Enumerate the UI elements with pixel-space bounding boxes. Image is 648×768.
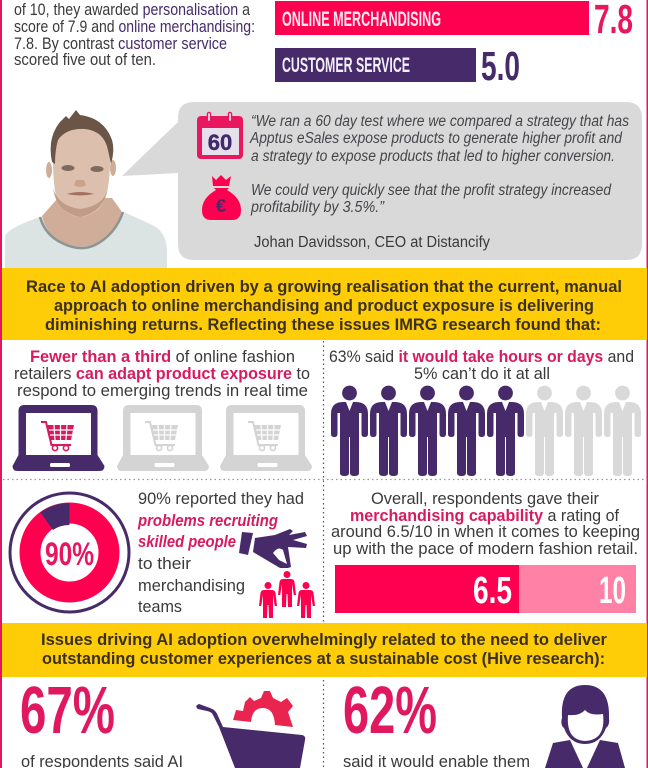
bar chart: rating 6.5 of 10: 6.5 (473, 570, 512, 612)
text block: recruiting problems: problems recruiting (137, 512, 278, 530)
banner: issues driving AI adoption: Issues driving AI adoption overwhelmingly related to the need to deliver (41, 630, 607, 649)
dotted dividers (3, 341, 646, 768)
text block: merchandising capability: around 6.5/10 in when it comes to keeping (331, 523, 640, 541)
chart: 90 percent donut (10, 493, 129, 612)
text block: score summary: 7.8. By contrast customer service (14, 35, 227, 53)
icon: money bag (202, 175, 241, 220)
speech bubble quote: Johan Davidsson, CEO at Distancify (254, 234, 490, 251)
text block: merchandising capability: merchandising capability a rating of (350, 507, 619, 525)
text block: score summary: scored five out of ten. (14, 51, 156, 69)
stat: 62 percent (343, 673, 530, 768)
icon: calendar 60: 60 (208, 130, 232, 155)
banner: race to AI adoption: diminishing returns. Reflecting these issues IMRG research found that: (45, 315, 601, 334)
text block: fewer than a third: respond to emerging trends in real time (17, 382, 308, 400)
chart: 90 percent donut: 90% (45, 536, 94, 572)
text block: merchandising capability (331, 490, 640, 558)
bar: customer service: CUSTOMER SERVICE (282, 54, 410, 77)
bar: online merchandising (275, 0, 633, 42)
text block: recruiting problems: to their (138, 555, 192, 573)
stat: 62 percent: 62% (343, 673, 437, 748)
text block: recruiting problems (137, 490, 304, 616)
text block: fewer than a third (14, 348, 310, 400)
icon: laptops with carts (12, 405, 312, 471)
bar chart: rating 6.5 of 10: 10 (599, 570, 626, 612)
banner: race to AI adoption (2, 268, 647, 340)
text block: recruiting problems: skilled people (138, 533, 236, 551)
banner: race to AI adoption: approach to online merchandising and product exposure is delivering (54, 296, 594, 315)
text block: score summary: score of 7.9 and online merchandising: (14, 18, 255, 36)
bar: customer service (275, 43, 520, 89)
bar chart: rating 6.5 of 10 (335, 565, 636, 613)
speech bubble quote: profitability by 3.5%.” (250, 199, 385, 216)
icon: hand picking people (239, 529, 315, 618)
text block: score summary (14, 1, 255, 69)
icon: calendar 60 (197, 114, 243, 159)
speech bubble quote (122, 102, 642, 260)
icon: money bag: € (216, 196, 226, 216)
text block: 63 percent (329, 348, 634, 383)
text block: merchandising capability: Overall, respondents gave their (371, 490, 599, 508)
speech bubble quote: We could very quickly see that the profit strategy increased (251, 182, 612, 199)
stat: 67 percent (20, 673, 183, 768)
bar: online merchandising: ONLINE MERCHANDISING (282, 8, 441, 31)
stat: 67 percent: 67% (20, 673, 115, 748)
banner: race to AI adoption: Race to AI adoption driven by a growing realisation that the current, manual (26, 277, 622, 296)
text block: recruiting problems: merchandising (138, 577, 245, 595)
text block: recruiting problems: 90% reported they had (138, 490, 304, 508)
photo: Johan Davidsson (5, 110, 167, 268)
icon: row of business people (331, 386, 641, 476)
banner: issues driving AI adoption (2, 623, 647, 677)
banner: issues driving AI adoption: outstanding customer experiences at a sustainable cost (Hive research): (42, 649, 605, 668)
icon: customer service agent (545, 685, 625, 768)
text block: fewer than a third: Fewer than a third of online fashion (30, 348, 295, 366)
text block: recruiting problems: teams (138, 598, 182, 616)
text block: fewer than a third: retailers can adapt product exposure to (14, 365, 310, 383)
text block: merchandising capability: up with the pace of modern fashion retail. (333, 540, 638, 558)
bar: customer service: 5.0 (481, 43, 520, 89)
text block: 63 percent: 5% can’t do it at all (414, 365, 550, 383)
speech bubble quote: a strategy to expose products that led to higher conversion. (251, 148, 615, 165)
text block: score summary: of 10, they awarded personalisation a (14, 1, 251, 19)
text block: 63 percent: 63% said it would take hours or days and (329, 348, 634, 366)
icon: shopping cart with gear (196, 691, 305, 768)
